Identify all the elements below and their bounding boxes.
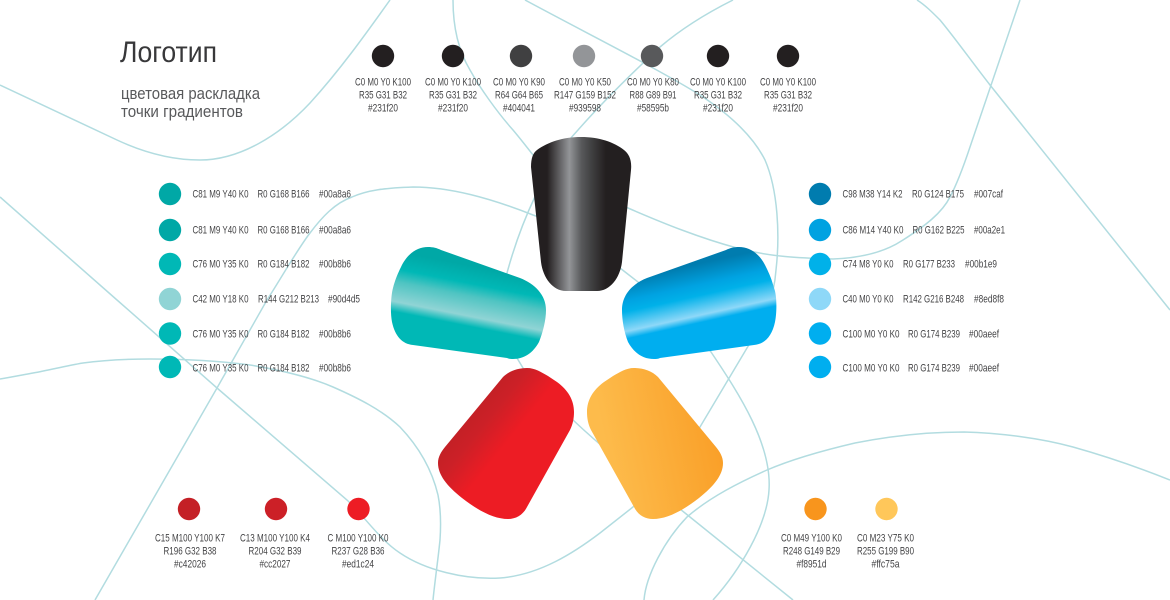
swatch: orange: #f8951d bbox=[796, 558, 826, 570]
swatch row: teal 5: C76 M0 Y35 K0 bbox=[192, 328, 248, 340]
swatch: grey 90: #404041 bbox=[503, 102, 535, 114]
swatch row: pale blue bbox=[809, 288, 1004, 310]
swatch row: teal 5: #00b8b6 bbox=[319, 328, 351, 340]
swatch: grey 80: R88 G89 B91 bbox=[630, 90, 676, 102]
swatch: grey 80: #58595b bbox=[637, 102, 669, 114]
swatch row: teal 3: #00b8b6 bbox=[319, 258, 351, 270]
swatch row: teal 1: R0 G168 B166 bbox=[258, 188, 310, 200]
swatch: black 1: #231f20 bbox=[368, 102, 398, 114]
swatch row: blue 6: C100 M0 Y0 K0 bbox=[842, 362, 900, 374]
swatch row: blue 5: R0 G174 B239 bbox=[908, 328, 960, 340]
swatch: bright red bbox=[328, 498, 388, 570]
swatch row: teal 2: #00a8a6 bbox=[319, 224, 351, 236]
swatch: black 4: R35 G31 B32 bbox=[764, 90, 812, 102]
swatch: black 2: #231f20 bbox=[438, 102, 468, 114]
logo: five-petal star bbox=[391, 137, 776, 519]
swatch row: blue 3: #00b1e9 bbox=[965, 258, 997, 270]
swatch row: blue 2: R0 G162 B225 bbox=[912, 224, 964, 236]
swatch: mid red bbox=[240, 498, 310, 570]
panel: red palette row bbox=[155, 498, 388, 570]
swatch row: blue 2 bbox=[809, 219, 1005, 241]
swatch row: teal 1 bbox=[159, 183, 351, 205]
swatch: black 2: C0 M0 Y0 K100 bbox=[425, 76, 481, 88]
swatch: grey 50: #939598 bbox=[569, 102, 601, 114]
swatch: orange: R248 G149 B29 bbox=[783, 546, 840, 558]
swatch row: teal 6: C76 M0 Y35 K0 bbox=[192, 362, 248, 374]
swatch row: teal 1: C81 M9 Y40 K0 bbox=[192, 188, 248, 200]
swatch row: teal 5 bbox=[159, 322, 351, 345]
swatch row: teal 2: R0 G168 B166 bbox=[258, 224, 310, 236]
swatch row: blue 6: R0 G174 B239 bbox=[908, 362, 960, 374]
swatch: bright red: R237 G28 B36 bbox=[332, 546, 384, 558]
swatch: dark red: C15 M100 Y100 K7 bbox=[155, 532, 225, 544]
petal: teal bbox=[391, 247, 546, 359]
swatch row: blue 2: C86 M14 Y40 K0 bbox=[842, 224, 904, 236]
panel: teal palette list bbox=[159, 183, 360, 378]
swatch: black 3: C0 M0 Y0 K100 bbox=[690, 76, 746, 88]
swatch row: pale blue: R142 G216 B248 bbox=[903, 294, 964, 306]
swatch: black 3: #231f20 bbox=[703, 102, 733, 114]
swatch row: blue 6: #00aeef bbox=[969, 362, 1000, 374]
swatch row: teal 3: R0 G184 B182 bbox=[258, 258, 310, 270]
swatch row: teal 6: R0 G184 B182 bbox=[258, 362, 310, 374]
swatch: black 1 bbox=[355, 45, 411, 114]
swatch row: blue 2: #00a2e1 bbox=[974, 224, 1005, 236]
panel: black palette row bbox=[355, 45, 816, 114]
swatch row: teal 3 bbox=[159, 253, 351, 275]
subtitle: точки градиентов bbox=[121, 103, 243, 121]
swatch row: pale teal: #90d4d5 bbox=[328, 294, 360, 306]
swatch row: teal 6: #00b8b6 bbox=[319, 362, 351, 374]
swatch: black 4 bbox=[760, 45, 816, 114]
swatch: grey 90: R64 G64 B65 bbox=[495, 90, 543, 102]
swatch: black 1: C0 M0 Y0 K100 bbox=[355, 76, 411, 88]
petal: blue bbox=[622, 247, 776, 359]
swatch row: blue 3: C74 M8 Y0 K0 bbox=[842, 258, 894, 270]
panel: orange palette row bbox=[781, 498, 914, 570]
swatch row: blue 1: R0 G124 B175 bbox=[912, 188, 964, 200]
swatch row: teal 6 bbox=[159, 356, 351, 378]
panel: blue palette list bbox=[809, 183, 1005, 378]
petal: red bbox=[438, 368, 574, 519]
swatch row: blue 5: #00aeef bbox=[969, 328, 1000, 340]
swatch row: blue 3: R0 G177 B233 bbox=[903, 258, 955, 270]
swatch: black 4: #231f20 bbox=[773, 102, 803, 114]
swatch: grey 80: C0 M0 Y0 K80 bbox=[627, 76, 679, 88]
swatch row: pale blue: #8ed8f8 bbox=[974, 294, 1004, 306]
swatch row: pale teal bbox=[159, 288, 360, 310]
petal: orange bbox=[587, 368, 723, 519]
swatch: yellow: C0 M23 Y75 K0 bbox=[857, 532, 914, 544]
swatch: yellow bbox=[857, 498, 914, 570]
swatch: black 2 bbox=[425, 45, 481, 114]
swatch row: teal 2 bbox=[159, 219, 351, 241]
swatch row: teal 5: R0 G184 B182 bbox=[258, 328, 310, 340]
swatch: orange bbox=[781, 498, 842, 570]
swatch row: blue 1 bbox=[809, 183, 1004, 205]
title: Логотип bbox=[120, 36, 217, 69]
swatch row: blue 5: C100 M0 Y0 K0 bbox=[842, 328, 900, 340]
swatch: mid red: C13 M100 Y100 K4 bbox=[240, 532, 310, 544]
subtitle: цветовая раскладка bbox=[121, 85, 261, 103]
swatch row: pale blue: C40 M0 Y0 K0 bbox=[842, 294, 894, 306]
swatch: grey 80 bbox=[627, 45, 679, 114]
swatch row: blue 1: #007caf bbox=[974, 188, 1004, 200]
swatch: dark red bbox=[155, 498, 225, 570]
swatch row: teal 2: C81 M9 Y40 K0 bbox=[192, 224, 248, 236]
swatch row: blue 1: C98 M38 Y14 K2 bbox=[842, 188, 902, 200]
swatch: dark red: #c42026 bbox=[174, 558, 206, 570]
swatch: dark red: R196 G32 B38 bbox=[164, 546, 216, 558]
swatch: black 2: R35 G31 B32 bbox=[429, 90, 477, 102]
swatch: black 3: R35 G31 B32 bbox=[694, 90, 742, 102]
swatch row: pale teal: C42 M0 Y18 K0 bbox=[192, 294, 248, 306]
swatch row: teal 3: C76 M0 Y35 K0 bbox=[192, 258, 248, 270]
swatch row: pale teal: R144 G212 B213 bbox=[258, 294, 319, 306]
swatch row: blue 3 bbox=[809, 253, 997, 275]
swatch: grey 90: C0 M0 Y0 K90 bbox=[493, 76, 545, 88]
swatch: black 4: C0 M0 Y0 K100 bbox=[760, 76, 816, 88]
swatch row: teal 1: #00a8a6 bbox=[319, 188, 351, 200]
swatch: black 1: R35 G31 B32 bbox=[359, 90, 407, 102]
swatch: yellow: R255 G199 B90 bbox=[857, 546, 914, 558]
swatch: orange: C0 M49 Y100 K0 bbox=[781, 532, 842, 544]
swatch: bright red: C M100 Y100 K0 bbox=[328, 532, 388, 544]
swatch: grey 50: C0 M0 Y0 K50 bbox=[559, 76, 611, 88]
swatch: bright red: #ed1c24 bbox=[342, 558, 374, 570]
swatch: grey 50: R147 G159 B152 bbox=[554, 90, 616, 102]
swatch: grey 50 bbox=[554, 45, 616, 114]
swatch: black 3 bbox=[690, 45, 746, 114]
swatch row: blue 5 bbox=[809, 322, 1000, 345]
swatch: grey 90 bbox=[493, 45, 545, 114]
swatch: mid red: #cc2027 bbox=[260, 558, 290, 570]
swatch: yellow: #ffc75a bbox=[872, 558, 900, 570]
swatch row: blue 6 bbox=[809, 356, 1000, 378]
petal: black bbox=[531, 137, 631, 291]
swatch: mid red: R204 G32 B39 bbox=[248, 546, 302, 558]
subtitle bbox=[121, 85, 261, 121]
